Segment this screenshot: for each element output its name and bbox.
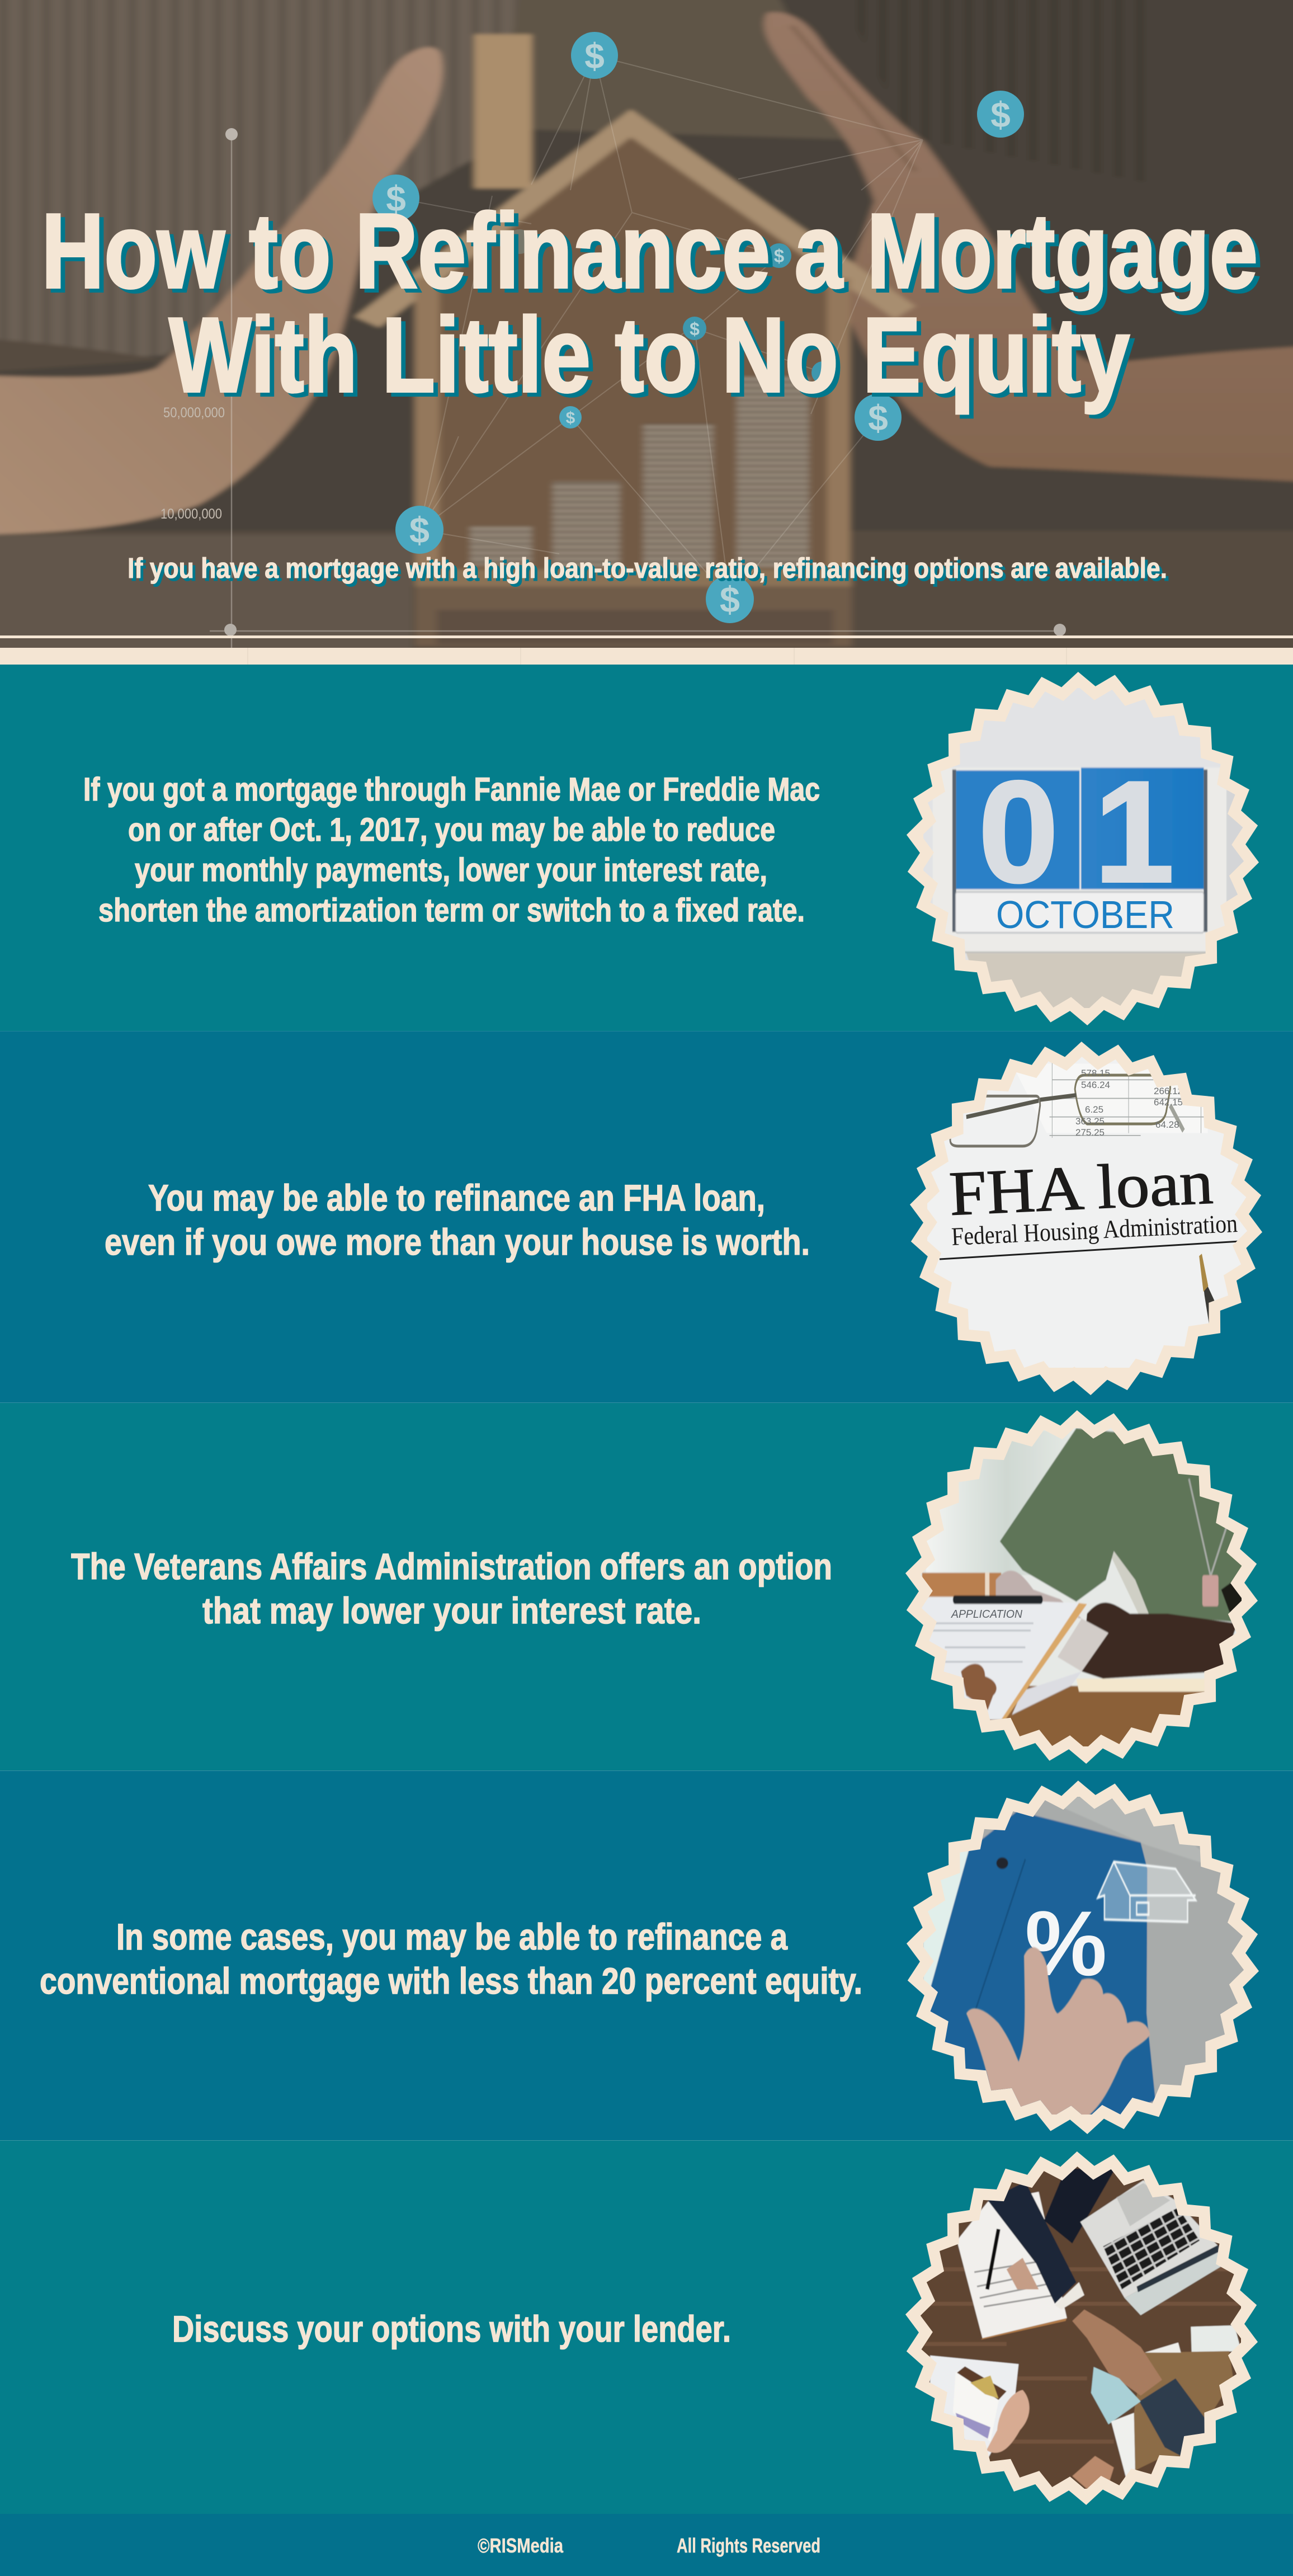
icons: dollar coins: $ [386,178,406,219]
icons: dollar coins: $ [868,398,888,438]
icons: dollar coins: $ [990,95,1011,135]
icons: dollar coins: $ [409,510,430,550]
photo badge: FHA loan document: 266.12 [1154,1086,1183,1096]
text block: conventional mortgage with less than 20 percent equity. [40,1960,862,2002]
icons: dollar coins [372,32,1024,623]
panel: row 4 conventional mortgage [40,1773,1275,2158]
panel: row 5 discuss with lender [172,2143,1275,2516]
panel: row 3 Veterans Affairs [71,1402,1275,1777]
panel: hero header [0,0,1293,665]
photo badge: FHA loan document: 546.24 [1081,1080,1110,1090]
subtitle: If you have a mortgage with a high loan-to-value ratio, refinancing options are available. [128,552,1167,584]
photo badge: application clipboard: APPLICATION [951,1608,1023,1621]
cream rule [0,635,1293,638]
cream band [0,648,1293,665]
text block [105,1177,810,1263]
text block: In some cases, you may be able to refinance a [116,1916,788,1957]
hero photo: hands protecting wooden house with coins [0,0,1293,648]
text block: your monthly payments, lower your interest rate, [135,852,767,888]
photo badge: FHA loan document: 642.15 [1154,1097,1183,1108]
text block: on or after Oct. 1, 2017, you may be able to reduce [128,812,775,848]
footer: ©RISMedia [478,2534,564,2557]
photo badge: FHA loan document: 6.25 [1085,1104,1103,1115]
text block: If you got a mortgage through Fannie Mae or Freddie Mac [83,771,820,808]
text block [83,771,820,929]
title [41,192,1258,415]
text block: The Veterans Affairs Administration offers an option [71,1546,832,1587]
footer [478,2534,820,2557]
photo badge: calendar 01 October: OCTOBER [996,893,1174,936]
photo badge: FHA loan document: 275.25 [1075,1127,1105,1138]
photo badge: calendar 01 October: 0 [978,751,1059,912]
network lines [396,55,923,599]
photo badge: FHA loan document: 64.28 [1155,1119,1179,1130]
photo badge: calendar 01 October: 1 [1094,751,1174,912]
text block: You may be able to refinance an FHA loan, [148,1177,765,1218]
photo badge: FHA loan document [910,1042,1262,1395]
text block: shorten the amortization term or switch to a fixed rate. [98,892,805,929]
photo badge: percent and house over hand: % [1025,1892,1107,1995]
photo badge: FHA loan document: Federal Housing Administration [951,1209,1238,1251]
photo badge: FHA loan document: FHA loan [947,1147,1215,1229]
text block [40,1916,862,2002]
panel: row 1 Fannie Mae / Freddie Mac [83,660,1275,1031]
chart axis with dots and labels: 50,000,000 [163,405,225,421]
footer: All Rights Reserved [677,2534,820,2557]
photo badge: calendar 01 October [907,672,1259,1025]
text block: Discuss your options with your lender. [172,2308,731,2349]
photo badge: handshake over desk [905,2151,1258,2505]
photo badge: FHA loan document: 363.25 [1075,1116,1105,1127]
text block: that may lower your interest rate. [202,1590,701,1631]
chart axis with dots and labels: 10,000,000 [161,506,222,522]
icons: dollar coins: $ [690,319,700,339]
photo badge: FHA loan document: 578.15 [1081,1068,1110,1079]
icons: dollar coins: $ [584,36,605,76]
chart axis with dots and labels [161,128,1066,648]
photo badge: percent and house over hand [907,1781,1259,2134]
icons: dollar coins: $ [566,409,575,427]
photo badge: application clipboard [905,1410,1258,1764]
text block: even if you owe more than your house is worth. [105,1221,810,1263]
panel: row 2 FHA loan [105,1029,1275,1410]
row backgrounds [0,665,1293,2576]
icons: dollar coins: $ [720,579,740,620]
icons: dollar coins: $ [774,246,784,266]
text block [71,1546,832,1631]
